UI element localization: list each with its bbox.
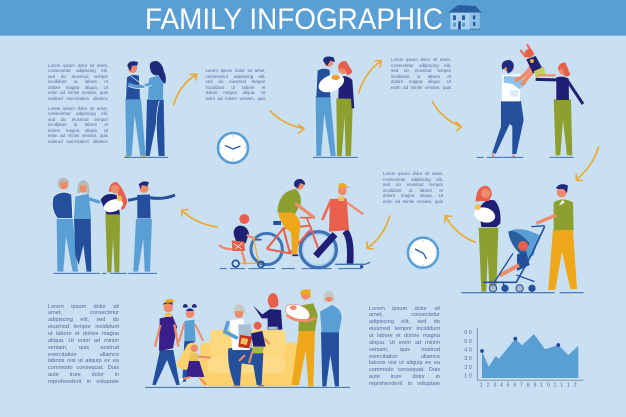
text block: bottom centre	[369, 306, 440, 387]
text block: top left 2: dolore magna aliqua. Ut	[48, 128, 108, 133]
arrow 8	[182, 210, 217, 227]
text block: middle right: dolore magna aliqua. Ut	[383, 193, 443, 198]
text block: bottom centre: veniam, quis nostrud	[369, 347, 440, 353]
text block: bottom left: amet, consectetur	[48, 310, 119, 316]
chart x axis labels: 1	[540, 383, 543, 389]
chart x axis labels: 2	[574, 383, 577, 389]
text block: top centre: Lorem ipsum dolor sit amet,	[206, 68, 266, 73]
chart x axis labels: 1	[554, 383, 557, 389]
text block: top centre: consectetur adipiscing elit,	[206, 74, 266, 79]
text block: bottom left	[48, 304, 119, 385]
text block: top right: incididunt ut labore et	[391, 74, 451, 79]
chart x axis labels: 1	[480, 383, 483, 389]
text block: top right: consectetur adipiscing elit,	[391, 63, 451, 68]
text block: top left 2: enim ad minim veniam, quis	[48, 133, 108, 138]
chart x axis labels: 2	[487, 383, 490, 389]
icon: clock top	[218, 133, 248, 163]
chart x axis labels: 9	[533, 383, 536, 389]
area chart	[464, 328, 584, 389]
sub: scooter	[232, 238, 264, 267]
text block: top left 1: incididunt ut labore et	[48, 79, 108, 84]
text block: bottom centre: eiusmod tempor incididunt	[369, 326, 440, 332]
chart y axis labels: 4 0	[464, 348, 472, 354]
figure: young couple embracing	[124, 61, 168, 157]
text block: bottom left: laboris nisi ut aliquip ex ea	[48, 358, 119, 364]
sub: father with baby	[283, 289, 318, 386]
text block: top left 1: Lorem ipsum dolor sit amet,	[48, 63, 108, 68]
text block: top centre: dolore magna aliqua. Ut	[206, 90, 266, 95]
text block: middle right: Lorem ipsum dolor sit amet,	[383, 171, 443, 176]
text block: middle right: incididunt ut labore et	[383, 188, 443, 193]
sub: woman behind sofa	[253, 293, 282, 330]
text block: top left 1: dolore magna aliqua. Ut	[48, 85, 108, 90]
text block: middle right	[383, 171, 443, 204]
figure: multi-generation group	[52, 178, 175, 273]
arrow 3	[359, 60, 381, 93]
text block: bottom left: commodo consequat. Duis	[48, 365, 119, 371]
text block: bottom centre: reprehenderit in voluptate	[369, 381, 440, 387]
text block: bottom left: Lorem ipsum dolor sit	[48, 304, 119, 310]
text block: top left 2: incididunt ut labore et	[48, 122, 108, 127]
text block: bottom centre: commodo consequat. Duis	[369, 367, 440, 373]
chart y axis labels: 5 0	[464, 339, 472, 345]
text block: top left 1: sed do eiusmod tempor	[48, 74, 108, 79]
figure: parents with newborn	[313, 57, 358, 157]
sub: sofa	[200, 330, 298, 386]
text block: top left 2: consectetur adipiscing elit,	[48, 111, 108, 116]
text block: bottom left: reprehenderit in voluptate	[48, 379, 119, 385]
text block: middle right: sed do eiusmod tempor	[383, 182, 443, 187]
chart x axis labels: 4	[500, 383, 503, 389]
text block: bottom left: eiusmod tempor incididunt	[48, 324, 119, 330]
text block: bottom left: aute irure dolor in	[48, 372, 119, 378]
text block: top left 1: consectetur adipiscing elit,	[48, 68, 108, 73]
chart y axis labels: 3 0	[464, 356, 472, 362]
sub: small blonde girl	[176, 343, 211, 387]
text block: top right: sed do eiusmod tempor	[391, 68, 451, 73]
sub: child on lap	[239, 322, 270, 363]
figure: parents playing with child	[477, 44, 583, 157]
chart y axis labels: 2 0	[464, 365, 472, 371]
chart x axis labels: 6	[513, 383, 516, 389]
sub: boy with cap	[152, 299, 180, 385]
text block: top right: Lorem ipsum dolor sit amet,	[391, 57, 451, 62]
chart y axis labels: 6 0	[464, 330, 472, 336]
chart x axis labels	[480, 383, 577, 389]
sub: bicycle wheels and frame	[251, 218, 336, 268]
text block: bottom left: adipiscing elit, sed do	[48, 317, 119, 323]
icon: house	[448, 5, 482, 30]
sub: grandmother reading	[225, 304, 264, 386]
text block: top centre	[206, 68, 266, 101]
chart x axis labels: 0	[547, 383, 550, 389]
sub: older woman	[320, 291, 342, 386]
text block: top right: dolore magna aliqua. Ut	[391, 79, 451, 84]
text block: top left 1: nostrud exercitation ullamco	[48, 96, 108, 101]
sub: stroller	[483, 226, 545, 292]
arrow 5	[576, 147, 599, 180]
chart x axis labels: 1	[567, 383, 570, 389]
text block: middle right: enim ad minim veniam, quis	[383, 199, 443, 204]
arrow 1	[174, 74, 197, 105]
text block: bottom centre: adipiscing elit, sed do	[369, 319, 440, 325]
figure: extended family on sofa	[145, 289, 350, 387]
chart x axis labels: 8	[527, 383, 530, 389]
text block: bottom left: exercitation ullamco	[48, 352, 119, 358]
text block: bottom left: aliqua. Ut enim ad minim	[48, 338, 119, 344]
chart y axis labels	[464, 330, 472, 380]
text block: bottom centre: laboris nisi ut aliquip ex ea	[369, 360, 440, 366]
text block: top left 2: Lorem ipsum dolor sit amet,	[48, 106, 108, 111]
title: FAMILY INFOGRAPHIC	[145, 3, 443, 36]
text block: bottom centre: Lorem ipsum dolor sit	[369, 306, 440, 312]
arrow 6	[445, 216, 475, 242]
text block: middle right: consectetur adipiscing elit,	[383, 177, 443, 182]
text block: bottom centre: aliqua. Ut enim ad minim	[369, 340, 440, 346]
text block: bottom left: veniam, quis nostrud	[48, 345, 119, 351]
text block: top right	[391, 57, 451, 90]
text block: bottom centre: exercitation ullamco	[369, 354, 440, 360]
chart x axis labels: 5	[507, 383, 510, 389]
figure: father cycling, child on scooter, mother on skateboard	[219, 179, 370, 269]
arrow 7	[367, 216, 390, 249]
text block: top left 2	[48, 106, 108, 144]
text block: top left 1: enim ad minim veniam, quis	[48, 90, 108, 95]
text block: top left 2: nostrud exercitation ullamco	[48, 139, 108, 144]
chart x axis labels: 7	[520, 383, 523, 389]
text block: top centre: sed do eiusmod tempor	[206, 79, 266, 84]
text block: top centre: enim ad minim veniam, quis	[206, 96, 266, 101]
icon: clock middle	[408, 238, 438, 268]
text block: top left 2: sed do eiusmod tempor	[48, 117, 108, 122]
figure: mother with newborn, father pushing stroller	[461, 184, 584, 293]
text block: bottom centre: ut labore et dolore magna	[369, 333, 440, 339]
text block: top right: enim ad minim veniam, quis	[391, 85, 451, 90]
text block: bottom left: ut labore et dolore magna	[48, 331, 119, 337]
chart x axis labels: 3	[493, 383, 496, 389]
text block: bottom centre: aute irure dolor in	[369, 374, 440, 380]
text block: bottom centre: amet, consectetur	[369, 312, 440, 318]
sub: girl with buns	[179, 304, 203, 382]
text block: top centre: incididunt ut labore et	[206, 85, 266, 90]
header band	[0, 0, 626, 36]
arrow 2	[270, 111, 304, 133]
chart y axis labels: 1 0	[464, 374, 472, 380]
arrow 4	[432, 102, 461, 130]
text block: top left 1	[48, 63, 108, 101]
chart x axis labels: 1	[560, 383, 563, 389]
